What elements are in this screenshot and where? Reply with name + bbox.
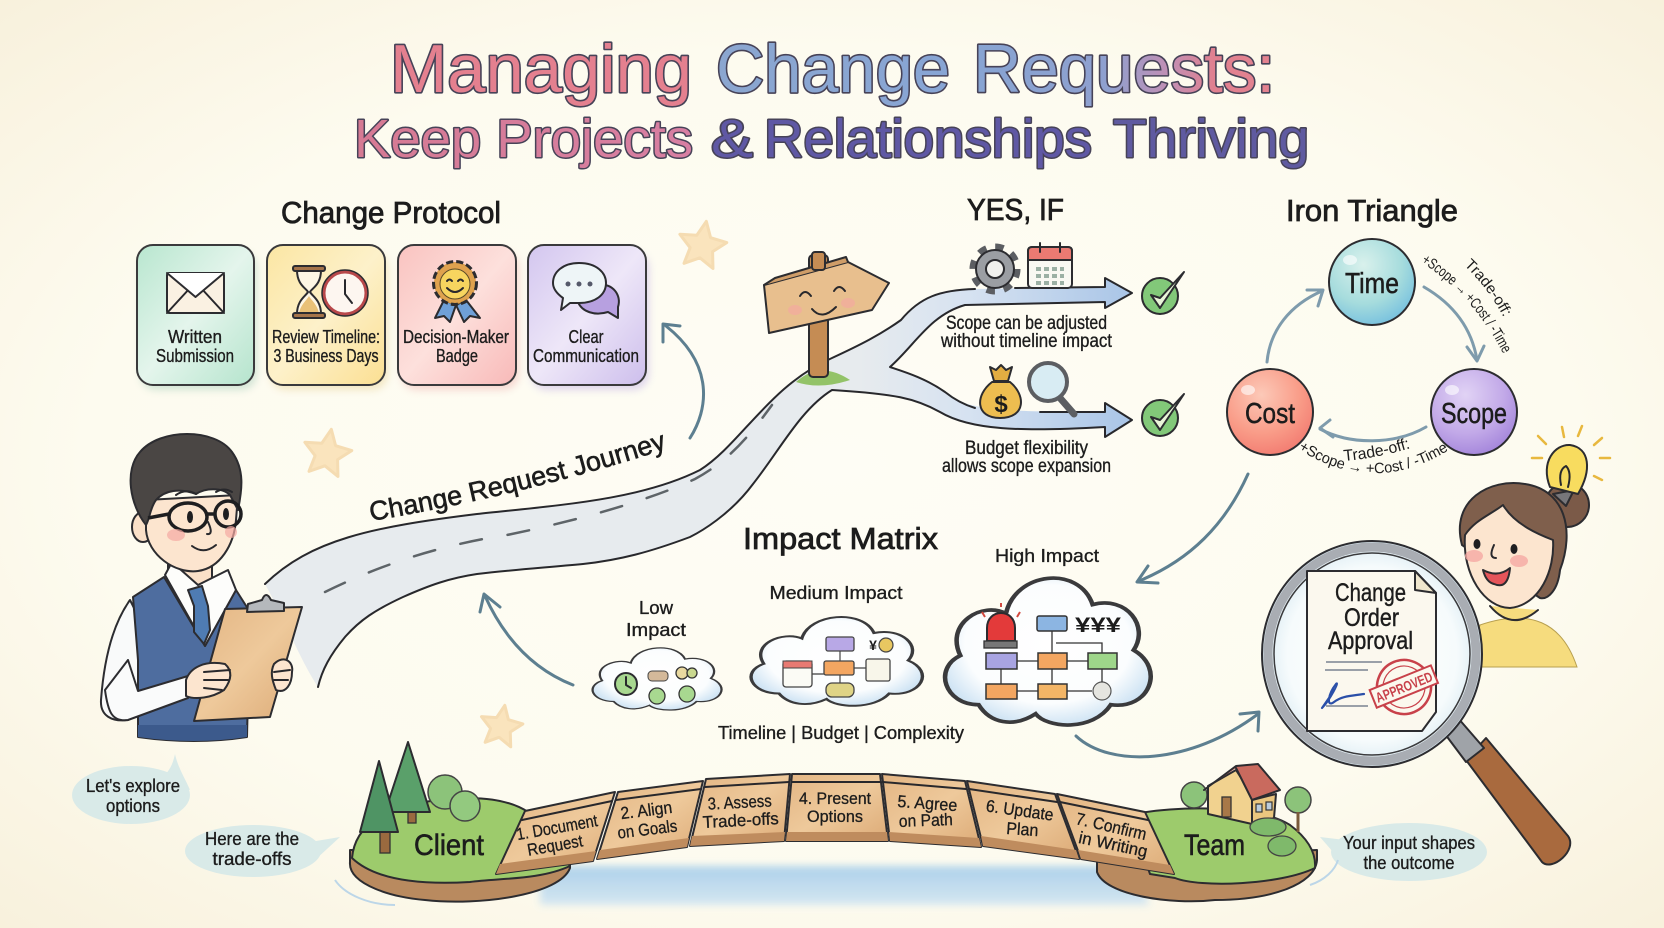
arrow: scope to cost	[1320, 420, 1426, 441]
bridge: seven steps	[496, 774, 1174, 874]
face	[1465, 505, 1553, 608]
card: review timeline	[267, 245, 388, 390]
card: written submission: Submission	[156, 346, 234, 366]
hair	[131, 434, 241, 525]
card: clear communication: Clear	[568, 327, 604, 347]
document	[1307, 571, 1445, 731]
card: review timeline: Review Timeline:	[272, 327, 380, 347]
heading: impact matrix: Impact Matrix	[743, 521, 939, 556]
panel: impact matrix	[593, 521, 1151, 743]
plank 6	[967, 781, 1079, 859]
document: Change	[1335, 579, 1406, 607]
island: team: Team	[1184, 829, 1245, 862]
bubble: lets explore options: options	[106, 796, 160, 816]
hands	[186, 663, 230, 698]
icon: money bag: $	[994, 391, 1008, 418]
arrow: low impact to road	[480, 594, 573, 685]
arrow: impact matrix to magnifier	[1076, 712, 1259, 757]
title: Keep Projects	[354, 109, 693, 169]
island: client: Client	[414, 829, 485, 862]
heading: iron triangle: Iron Triangle	[1286, 193, 1458, 228]
plank 5: 5. Agree	[897, 792, 958, 815]
icon: check 2	[1142, 394, 1184, 436]
stamp: approved: APPROVED	[1373, 668, 1435, 706]
cloud: medium impact: ¥	[869, 637, 877, 653]
card: decision-maker badge	[398, 245, 519, 390]
plank 7	[1057, 794, 1174, 874]
label: trade-off bottom: Trade-off:	[1343, 438, 1410, 461]
title: Requests:	[973, 31, 1275, 107]
plank 7: in Writing	[1077, 828, 1149, 861]
plank 3: Trade-offs	[702, 809, 779, 832]
card: decision-maker badge: Badge	[436, 346, 478, 366]
cloud: high impact: ¥¥¥	[1075, 614, 1121, 637]
icon: envelope	[167, 273, 224, 313]
character: man with clipboard	[101, 434, 302, 741]
cloud: high impact	[945, 578, 1151, 725]
plank 1: Request	[526, 831, 585, 860]
icon: money bag	[980, 365, 1021, 418]
shirt collar	[165, 562, 236, 646]
sweater	[1470, 618, 1577, 667]
text: scope adjusted: Scope can be adjusted	[946, 313, 1107, 334]
document: Order	[1344, 604, 1399, 632]
document: Approval	[1328, 627, 1413, 655]
bubble: lets explore options: Let's explore	[86, 776, 180, 796]
bubble: lets explore options	[72, 754, 190, 824]
node: scope	[1431, 369, 1517, 455]
title: Relationships	[764, 109, 1092, 169]
text: budget flexibility	[942, 438, 1111, 477]
plank 4	[786, 774, 888, 841]
road: change request journey	[264, 277, 1133, 688]
handle	[1466, 738, 1570, 865]
arrow: time to scope	[1424, 287, 1484, 361]
label: trade-off bottom: +Scope → +Cost / -Time	[1301, 444, 1447, 474]
face	[146, 495, 238, 571]
heading: yes, if: YES, IF	[967, 192, 1064, 227]
arrow: journey to protocol	[663, 324, 704, 438]
arrow: cost to time	[1267, 290, 1323, 362]
title: Change	[716, 31, 950, 107]
card: review timeline: 3 Business Days	[274, 346, 378, 366]
text: scope adjusted: without timeline impact	[940, 331, 1113, 352]
plank 4: Options	[807, 807, 863, 826]
plank 5	[882, 774, 981, 847]
text: scope adjusted	[940, 313, 1113, 352]
card: written submission: Written	[168, 327, 222, 347]
icon: calendar	[1028, 243, 1072, 288]
plank 4: 4. Present	[799, 789, 871, 808]
title	[354, 31, 1309, 169]
bubble: your input: the outcome	[1364, 853, 1454, 873]
plank 3	[690, 774, 790, 846]
heading: change protocol: Change Protocol	[281, 195, 501, 230]
bun	[1545, 483, 1589, 527]
icon: clock	[322, 270, 368, 316]
decorative star left	[300, 425, 355, 478]
bubble: your input: Your input shapes	[1343, 833, 1475, 853]
lens	[1262, 541, 1482, 767]
panel: iron triangle	[1226, 193, 1518, 474]
plank 5: on Path	[898, 810, 953, 831]
card: decision-maker badge: Decision-Maker	[403, 327, 509, 347]
left sleeve	[101, 600, 150, 720]
plank 1: 1. Document	[515, 811, 599, 844]
plank 6: 6. Update	[985, 796, 1055, 825]
bubble: here are the trade-offs: trade-offs	[212, 849, 292, 869]
clipboard	[194, 607, 302, 721]
plank 2	[597, 781, 703, 859]
glasses	[148, 501, 241, 531]
label: low impact: Impact	[626, 620, 686, 640]
text: budget flexibility: Budget flexibility	[965, 438, 1088, 459]
node: time: Time	[1345, 268, 1399, 300]
plank 3: 3. Assess	[707, 791, 772, 814]
decorative star bottom	[477, 702, 526, 748]
plank 1	[496, 792, 615, 874]
icon: trees	[360, 742, 480, 853]
panel: yes, if	[940, 192, 1184, 477]
bubble: here are the trade-offs: Here are the	[205, 829, 299, 849]
title: Managing	[390, 31, 692, 107]
hair	[1460, 483, 1567, 598]
icon: check 1	[1142, 272, 1184, 314]
label: medium impact: Medium Impact	[770, 583, 902, 603]
tie	[188, 586, 210, 644]
plank 7: 7. Confirm	[1074, 809, 1148, 844]
title: &	[711, 109, 753, 169]
label: timeline budget complexity: Timeline | Budget | Complexity	[718, 723, 964, 743]
decorative star top	[675, 217, 730, 270]
icon: light bulb	[1532, 426, 1610, 506]
card: clear communication: Communication	[533, 346, 639, 366]
ear	[132, 512, 154, 542]
plank 2: on Goals	[616, 816, 678, 843]
plank 6: Plan	[1006, 819, 1039, 840]
road: change request journey: Change Request Journey	[370, 434, 663, 520]
icon: house	[1181, 764, 1311, 856]
label: high impact: High Impact	[995, 546, 1099, 566]
cloud: medium impact	[751, 617, 922, 706]
panel: change protocol	[137, 195, 649, 390]
card: written submission	[137, 245, 257, 390]
plank 2: 2. Align	[619, 798, 673, 823]
label: trade-off right: Trade-off:	[1466, 258, 1511, 316]
character: woman with idea	[1460, 426, 1610, 667]
node: scope: Scope	[1441, 398, 1507, 430]
label: low impact: Low	[639, 598, 674, 618]
label: low impact	[626, 598, 686, 640]
icon: gear	[974, 248, 1016, 290]
cloud: low impact	[593, 648, 722, 710]
stamp: approved	[1363, 650, 1445, 724]
vest	[133, 577, 250, 741]
label: journey	[371, 449, 666, 521]
icon: siren	[982, 603, 1020, 648]
icon: hourglass	[293, 266, 325, 318]
magnifier with change order approval	[1262, 541, 1570, 865]
arrow: triangle to high impact	[1137, 474, 1248, 583]
label: trade-off right: +Scope → +Cost / -Time	[1424, 256, 1510, 353]
water under bridge	[335, 860, 1338, 905]
icon: smiling badge	[434, 262, 480, 322]
bubble: here are the trade-offs	[185, 825, 340, 877]
icon: speech bubbles	[553, 263, 619, 318]
text: budget flexibility: allows scope expansion	[942, 456, 1111, 477]
island: client	[350, 742, 570, 902]
node: cost: Cost	[1245, 398, 1295, 430]
signature	[1322, 683, 1364, 708]
title: Thriving	[1113, 109, 1309, 169]
node: time	[1329, 239, 1415, 325]
neck	[168, 555, 212, 589]
island: team	[1097, 764, 1317, 901]
node: cost	[1227, 369, 1313, 455]
icon: smiling signpost	[764, 252, 889, 386]
card: clear communication	[528, 245, 649, 390]
bubble: your input	[1320, 823, 1487, 881]
icon: magnifier	[1029, 363, 1074, 414]
forearm	[105, 660, 188, 720]
